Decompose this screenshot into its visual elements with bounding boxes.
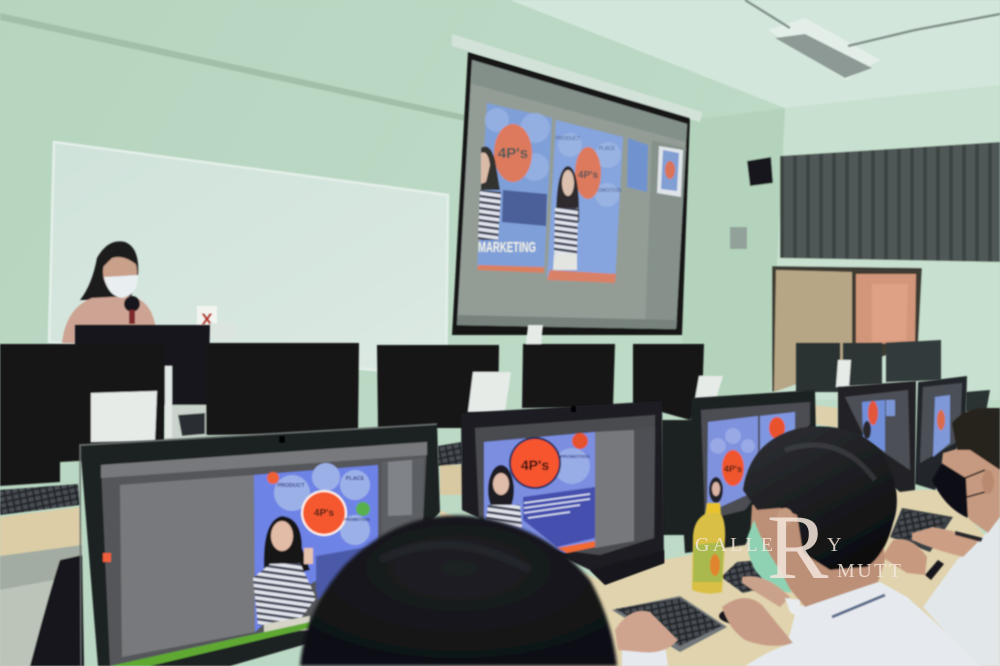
far monitor 2 xyxy=(843,343,882,386)
menu bar xyxy=(101,442,427,478)
orange circle two xyxy=(769,417,785,439)
text circles: PRODUCT xyxy=(556,136,580,142)
foreground student xyxy=(300,515,678,666)
right panel xyxy=(382,458,424,540)
door xyxy=(772,266,922,392)
white sleeve xyxy=(622,645,668,666)
front student xyxy=(722,426,980,666)
text circles: PLACE xyxy=(599,146,616,152)
back keyboard xyxy=(0,484,80,515)
text circles xyxy=(556,133,622,207)
thumbnail xyxy=(886,400,895,416)
orange footer xyxy=(547,270,616,283)
text circles xyxy=(710,428,755,454)
promotion circle xyxy=(340,515,370,545)
curtains xyxy=(780,142,1000,262)
desk left xyxy=(0,507,82,556)
orange circle xyxy=(509,437,561,489)
shirt xyxy=(923,517,1000,666)
microphone xyxy=(124,296,140,324)
orange stripe xyxy=(557,541,595,553)
watermark R: R xyxy=(767,496,829,598)
price circle xyxy=(312,463,340,491)
screen surface xyxy=(457,60,687,329)
wall rail xyxy=(0,13,465,121)
orange circle: 4P's xyxy=(578,170,599,181)
keyboard mid xyxy=(438,442,462,466)
face mask xyxy=(104,275,138,298)
red x sign: x xyxy=(201,307,213,330)
canvas gray xyxy=(595,430,634,548)
hand xyxy=(615,611,678,652)
right student xyxy=(882,408,1000,666)
hand on mouse xyxy=(722,598,793,646)
orange circle: 4P's xyxy=(521,457,549,473)
watermark rmutt: MUTT xyxy=(837,560,901,582)
canvas gray xyxy=(120,475,255,657)
watermark gallery: GALLE xyxy=(695,534,773,556)
green progress strip xyxy=(110,622,310,666)
woman on display xyxy=(486,465,522,528)
orange circle: 4P's xyxy=(724,464,742,474)
ceiling xyxy=(510,0,1000,108)
monitor row 2 d xyxy=(522,344,615,408)
promotion label: PROMOTION xyxy=(560,454,590,460)
thumbnail poster xyxy=(627,138,648,192)
shirt xyxy=(745,582,980,666)
poster two xyxy=(547,120,623,283)
orange product icon xyxy=(267,472,279,484)
promotion circle xyxy=(554,448,590,484)
blouse xyxy=(62,296,155,345)
monitor three xyxy=(683,390,816,553)
right panel xyxy=(634,426,655,541)
place circle xyxy=(340,470,370,500)
orange circle xyxy=(937,410,945,430)
ear xyxy=(777,508,793,526)
ear xyxy=(982,470,994,494)
display xyxy=(701,402,810,520)
under monitor gap xyxy=(662,420,692,535)
place circle: PLACE xyxy=(346,476,365,482)
monitor stand under two xyxy=(590,550,664,585)
marketing word: MARKETING xyxy=(478,239,536,256)
poster left xyxy=(707,416,758,513)
green badge xyxy=(356,502,370,516)
application toolbar xyxy=(472,60,687,142)
webcam xyxy=(279,436,285,443)
thumbnail white preview xyxy=(657,146,683,197)
dark text block xyxy=(316,545,378,600)
teacher xyxy=(62,241,238,345)
display xyxy=(845,390,910,470)
sleeve cuff xyxy=(785,598,800,618)
person on display xyxy=(709,477,723,503)
projector screen xyxy=(452,34,702,335)
ceiling light xyxy=(745,0,1000,80)
whiteboard xyxy=(49,142,448,376)
green mask xyxy=(747,520,792,593)
panel list xyxy=(388,460,412,516)
mouse xyxy=(719,608,757,624)
far monitor 3 xyxy=(886,340,941,382)
small orange icon xyxy=(572,433,588,449)
poster xyxy=(933,395,950,457)
orange footer xyxy=(477,265,544,273)
gap under teacher monitor xyxy=(165,405,207,440)
speaker xyxy=(747,157,773,186)
poster right xyxy=(760,412,795,470)
display xyxy=(920,383,962,463)
poster xyxy=(862,400,885,452)
right far monitor xyxy=(915,376,967,490)
main orange circle: 4P's xyxy=(314,508,335,519)
neck and face xyxy=(750,505,885,607)
monitor row 2 e xyxy=(633,344,704,420)
monitor two xyxy=(461,401,664,584)
red x sign xyxy=(197,306,217,330)
wristwatch xyxy=(925,560,944,580)
front desk items xyxy=(590,503,953,652)
orange circle xyxy=(722,450,744,486)
hair xyxy=(952,408,1000,470)
monitor stand edge xyxy=(165,366,172,438)
display xyxy=(475,415,655,555)
upper hand xyxy=(912,527,980,557)
poster xyxy=(484,432,595,553)
orange circle xyxy=(494,124,532,182)
display xyxy=(101,442,427,666)
neck and face xyxy=(940,445,1000,533)
mask straps xyxy=(965,470,985,497)
monitor one xyxy=(80,424,440,666)
monitor four xyxy=(838,381,916,492)
teacher keyboard xyxy=(178,413,205,436)
woman on display xyxy=(253,516,316,632)
product circle xyxy=(274,475,310,511)
text lines xyxy=(524,494,590,518)
screen housing xyxy=(452,34,702,122)
person on display xyxy=(863,421,871,439)
face xyxy=(103,250,137,294)
poster xyxy=(254,465,378,632)
dark text block xyxy=(523,487,595,547)
monitor row 2 left xyxy=(0,344,165,486)
promotion label: PROMOTION xyxy=(344,517,370,522)
product and place circles xyxy=(485,108,550,181)
main orange circle xyxy=(301,490,347,536)
lower arm xyxy=(882,539,927,575)
chair left xyxy=(30,555,84,666)
corner shade xyxy=(680,108,785,400)
phone xyxy=(955,531,983,542)
teacher monitor xyxy=(75,325,210,405)
front keyboard xyxy=(612,596,727,652)
watermark xyxy=(695,496,901,598)
screen frame xyxy=(452,52,690,335)
presenter photo xyxy=(553,166,579,270)
front desk xyxy=(440,490,1000,666)
tan strip behind monitors xyxy=(813,405,838,428)
monitor row 2 b xyxy=(206,343,359,435)
monitor row 2 c xyxy=(377,345,499,428)
paper notes xyxy=(91,325,851,442)
hair xyxy=(743,426,897,570)
tea bottle xyxy=(692,503,725,594)
desk left side xyxy=(0,545,82,590)
hand and sleeve xyxy=(615,611,678,666)
watermark Y: Y xyxy=(827,534,841,556)
webcam xyxy=(571,406,576,412)
text circles: PROMOTION xyxy=(591,188,622,194)
hair xyxy=(80,241,138,300)
back row monitors xyxy=(0,325,990,666)
wall switch box xyxy=(730,227,747,249)
presenter photo xyxy=(478,146,501,240)
hair sheen xyxy=(785,445,875,480)
collar line xyxy=(832,595,885,617)
black mask xyxy=(932,463,968,518)
text block xyxy=(502,190,547,226)
side panel xyxy=(645,140,686,329)
keyboard right xyxy=(721,560,775,593)
product circle: PRODUCT xyxy=(277,483,305,489)
hair xyxy=(300,515,617,666)
orange tool swatch xyxy=(103,553,111,562)
floor left xyxy=(0,575,82,666)
keyboard far right xyxy=(890,508,953,552)
orange circle xyxy=(868,401,878,425)
far chair xyxy=(966,390,990,412)
hand on keyboard xyxy=(742,576,790,607)
white card xyxy=(210,323,238,340)
desk small section xyxy=(440,465,464,495)
hair sheen xyxy=(380,545,530,570)
head xyxy=(300,515,617,666)
taskbar xyxy=(457,315,677,329)
monitor rim xyxy=(80,424,437,666)
orange circle xyxy=(575,147,601,199)
orange circle: 4P's xyxy=(498,145,528,162)
right wall xyxy=(770,85,1000,400)
poster one xyxy=(477,103,552,273)
hair fringe xyxy=(102,245,138,268)
far monitor 1 xyxy=(796,343,840,392)
